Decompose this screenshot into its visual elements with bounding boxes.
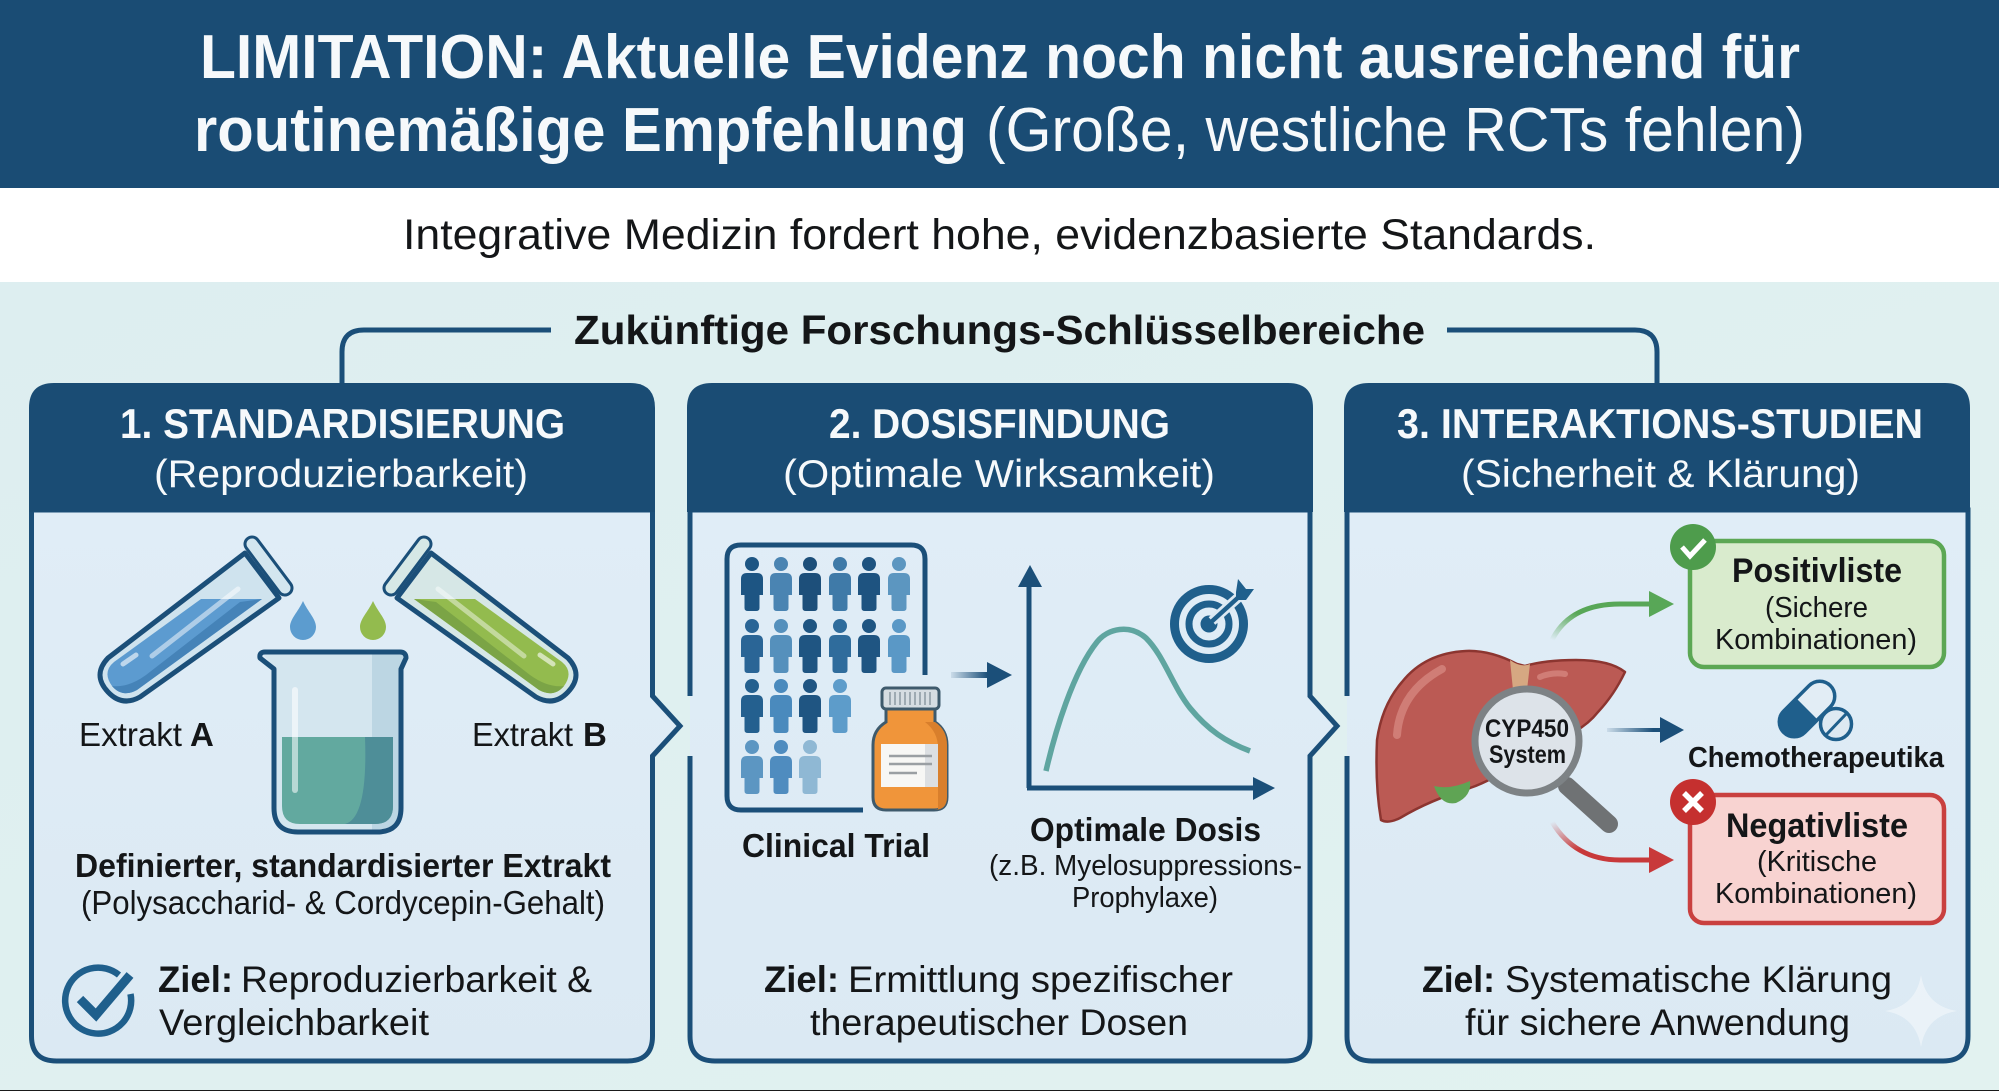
text: standardised extract: (Polysaccharid- & Cordycepin-Gehalt): [81, 884, 605, 921]
text: Ziel 2: Ermittlung spezifischer: [848, 959, 1233, 1000]
section heading with bracket: [342, 307, 1657, 384]
icon: liver: [1376, 651, 1625, 822]
label: Extrakt B: B: [583, 716, 607, 753]
title banner: LIMITATION: Aktuelle Evidenz noch nicht ausreichend für: [200, 23, 1800, 92]
section heading with bracket: Zukünftige Forschungs-Schlüsselbereiche: [574, 307, 1425, 353]
arrow: to Chemotherapeutika: [1607, 717, 1684, 743]
icon: beaker: [260, 652, 406, 832]
icon: test tube A: [100, 544, 285, 701]
title banner: routinemäßige Empfehlung: [194, 96, 967, 165]
card: Positivliste: (Sichere: [1765, 592, 1868, 624]
icon: trial frame: [727, 545, 925, 810]
icon: test tube B: [391, 544, 576, 701]
icon: sparkle: [1885, 975, 1957, 1047]
icon: green drop: [360, 601, 386, 640]
icon: participants: [741, 557, 910, 794]
arrow: to Negativliste: [1552, 822, 1674, 873]
text: Ziel 1: Reproduzierbarkeit &: [241, 959, 592, 1000]
subtitle band: Integrative Medizin fordert hohe, evidenzbasierte Standards.: [403, 211, 1596, 259]
icon: medicine bottle: [873, 688, 947, 810]
background: [0, 282, 1999, 1091]
panel: 2 Dosisfindung: [687, 383, 1337, 1061]
arrow: to Positivliste: [1552, 591, 1674, 640]
panel heading: 1. STANDARDISIERUNG: [120, 400, 565, 447]
icon: blue drop: [290, 601, 316, 640]
text: Ziel 3: [1422, 959, 1892, 1043]
text: Ziel 3: für sichere Anwendung: [1465, 1002, 1850, 1043]
icon: target: [1174, 579, 1254, 658]
card: Positivliste: Kombinationen): [1715, 624, 1917, 656]
panel heading: [120, 400, 565, 496]
text: optimal dose: [989, 811, 1302, 914]
title banner: [0, 0, 1999, 188]
panel heading: [783, 400, 1215, 496]
panel: 3 Interaktions-Studien: [1344, 383, 1970, 1061]
title banner: (Große, westliche RCTs fehlen): [986, 96, 1805, 165]
text: Ziel 2: therapeutischer Dosen: [810, 1002, 1188, 1043]
icon: magnifier CYP450: CYP450: [1485, 715, 1569, 743]
chart: dose response: [1018, 565, 1275, 800]
subtitle band: [0, 188, 1999, 282]
label: Clinical Trial: Clinical Trial: [742, 827, 930, 864]
label: Extrakt B: Extrakt: [472, 716, 573, 753]
card: Negativliste: Kombinationen): [1715, 878, 1917, 910]
arrow: trial to chart: [951, 662, 1012, 688]
label: Extrakt A: A: [190, 716, 214, 753]
panel heading: 2. DOSISFINDUNG: [829, 400, 1170, 447]
text: optimal dose: (z.B. Myelosuppressions-: [989, 850, 1302, 882]
text: optimal dose: Optimale Dosis: [1030, 811, 1261, 848]
card: Positivliste: [1670, 524, 1944, 667]
text: Ziel 2: [764, 959, 1233, 1043]
card: Negativliste: Negativliste: [1726, 807, 1908, 845]
panel: 1 Standardisierung: [29, 383, 680, 1061]
card: Negativliste: (Kritische: [1757, 846, 1877, 878]
panel heading: [1397, 400, 1923, 496]
text: Ziel 3: Ziel:: [1422, 959, 1495, 1000]
text: standardised extract: Definierter, standardisierter Extrakt: [75, 847, 611, 884]
panel heading: 3. INTERAKTIONS-STUDIEN: [1397, 400, 1923, 447]
card: Positivliste: Positivliste: [1732, 552, 1902, 590]
text: Ziel 3: Systematische Klärung: [1505, 959, 1892, 1000]
text: Ziel 1: Vergleichbarkeit: [159, 1002, 430, 1043]
icon: magnifier CYP450: System: [1489, 741, 1566, 769]
text: optimal dose: Prophylaxe): [1072, 882, 1218, 914]
text: standardised extract: [75, 847, 611, 921]
icon: pills: [1773, 675, 1852, 743]
icon: check circle: [65, 968, 131, 1034]
text: Ziel 1: Ziel:: [158, 959, 233, 1000]
panel heading: (Sicherheit & Klärung): [1461, 453, 1860, 496]
text: Ziel 1: [158, 959, 592, 1043]
label: Extrakt A: Extrakt: [79, 716, 182, 753]
card: Negativliste: [1670, 779, 1944, 923]
panel heading: (Reproduzierbarkeit): [154, 453, 528, 496]
text: Ziel 2: Ziel:: [764, 959, 839, 1000]
icon: magnifier CYP450: [1475, 689, 1609, 824]
label: Chemotherapeutika: Chemotherapeutika: [1688, 742, 1945, 774]
panel heading: (Optimale Wirksamkeit): [783, 453, 1215, 496]
